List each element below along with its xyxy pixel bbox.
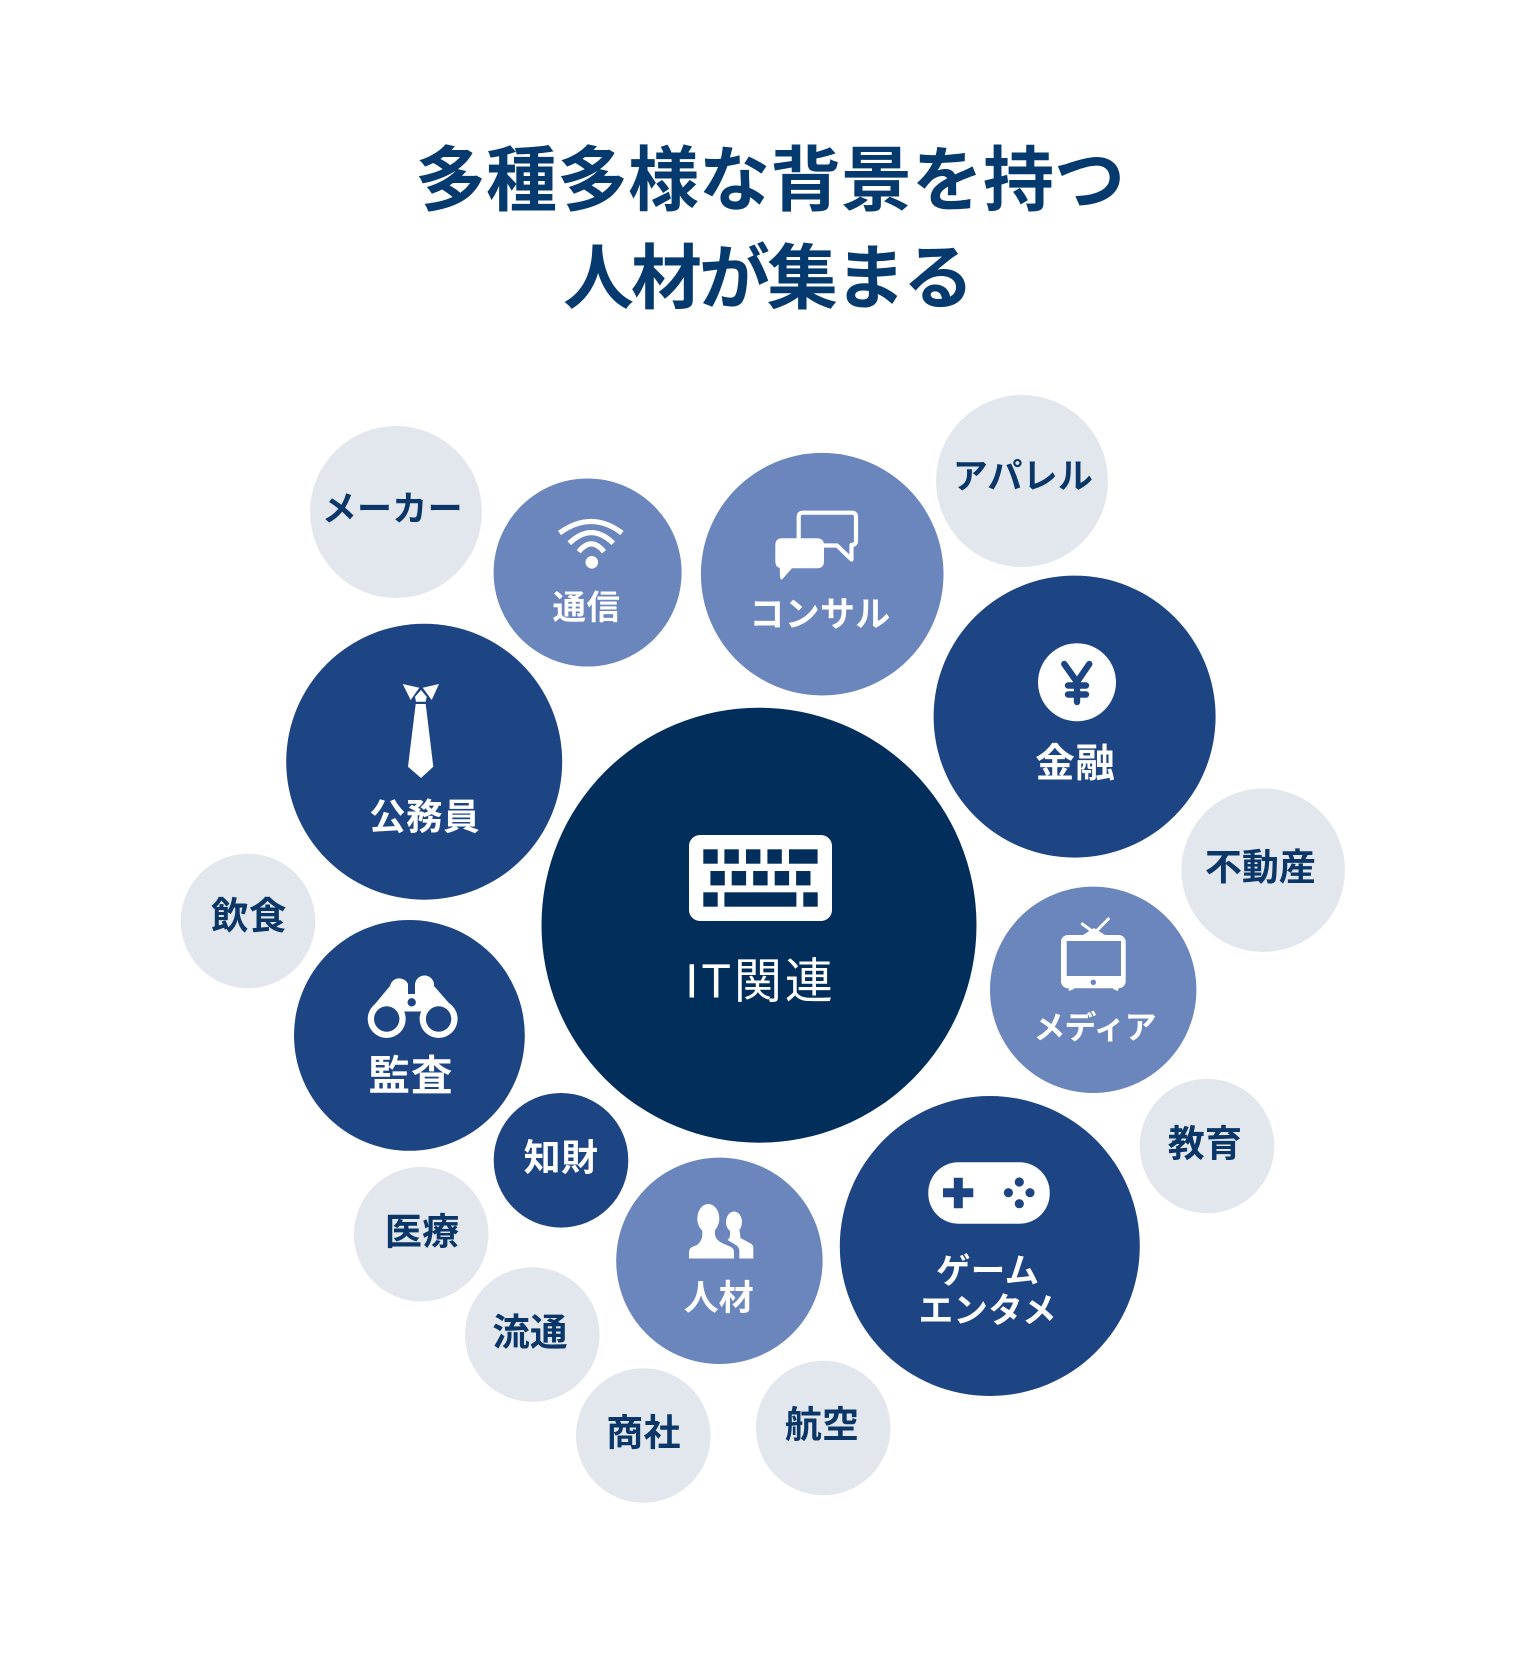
bubble: 医療 bbox=[354, 1167, 489, 1301]
bubble: 医療: 医療 bbox=[385, 1211, 460, 1252]
bubble: 商社: 商社 bbox=[606, 1413, 681, 1454]
bubble: メーカー bbox=[310, 426, 482, 598]
bubble: 航空: 航空 bbox=[785, 1404, 859, 1445]
bubble: コンサル bbox=[701, 453, 944, 696]
title: 人材が集まる bbox=[563, 240, 971, 319]
bubble: 商社 bbox=[576, 1368, 711, 1503]
bubble: 流通: 流通 bbox=[492, 1311, 568, 1353]
bubble: 流通 bbox=[465, 1267, 600, 1402]
icon: television bbox=[1061, 919, 1126, 991]
bubble: 知財: 知財 bbox=[524, 1138, 598, 1178]
bubble: メディア: メディア bbox=[1033, 1009, 1156, 1045]
bubble: 通信 bbox=[494, 478, 682, 666]
title: 多種多様な背景を持つ bbox=[415, 142, 1125, 221]
bubble: 公務員: 公務員 bbox=[369, 796, 480, 838]
bubble: 教育: 教育 bbox=[1168, 1124, 1242, 1164]
icon: game controller bbox=[928, 1162, 1050, 1224]
bubble: アパレル: アパレル bbox=[953, 458, 1093, 496]
bubble: 飲食 bbox=[181, 854, 315, 988]
bubble: 不動産: 不動産 bbox=[1205, 847, 1316, 888]
bubble: 監査 bbox=[294, 920, 525, 1151]
bubble: ゲームエンタメ bbox=[840, 1096, 1140, 1396]
bubble: 知財 bbox=[494, 1093, 628, 1228]
bubble: 通信: 通信 bbox=[552, 590, 620, 627]
bubble: メーカー: メーカー bbox=[322, 490, 463, 529]
bubble: コンサル: コンサル bbox=[749, 596, 891, 634]
icon: necktie bbox=[403, 684, 439, 778]
icon: chat bubbles bbox=[775, 513, 856, 579]
bubble: 金融: 金融 bbox=[1035, 742, 1115, 786]
bubble: アパレル bbox=[936, 395, 1108, 567]
bubble: メディア bbox=[990, 887, 1196, 1093]
icon: keyboard bbox=[689, 835, 832, 921]
bubble: 監査: 監査 bbox=[368, 1052, 454, 1099]
icon: wifi bbox=[560, 522, 622, 569]
bubble: 航空 bbox=[756, 1361, 890, 1495]
title bbox=[415, 142, 1125, 319]
bubble: IT関連 bbox=[542, 708, 976, 1143]
bubble: 飲食: 飲食 bbox=[211, 895, 287, 937]
bubble: ゲームエンタメ: ゲーム bbox=[936, 1253, 1039, 1291]
bubble: 教育 bbox=[1140, 1079, 1274, 1213]
icon: people bbox=[689, 1204, 753, 1258]
bubble: 人材 bbox=[616, 1158, 823, 1364]
icon: yen coin bbox=[1038, 643, 1116, 721]
bubble: 金融 bbox=[934, 576, 1216, 858]
bubble: 公務員 bbox=[286, 624, 562, 900]
bubble: IT関連: IT関連 bbox=[685, 956, 836, 1008]
bubble: ゲームエンタメ: エンタメ bbox=[919, 1293, 1057, 1331]
bubble: 人材: 人材 bbox=[684, 1279, 754, 1318]
bubble: 不動産 bbox=[1181, 788, 1345, 952]
icon: binoculars bbox=[368, 975, 458, 1038]
